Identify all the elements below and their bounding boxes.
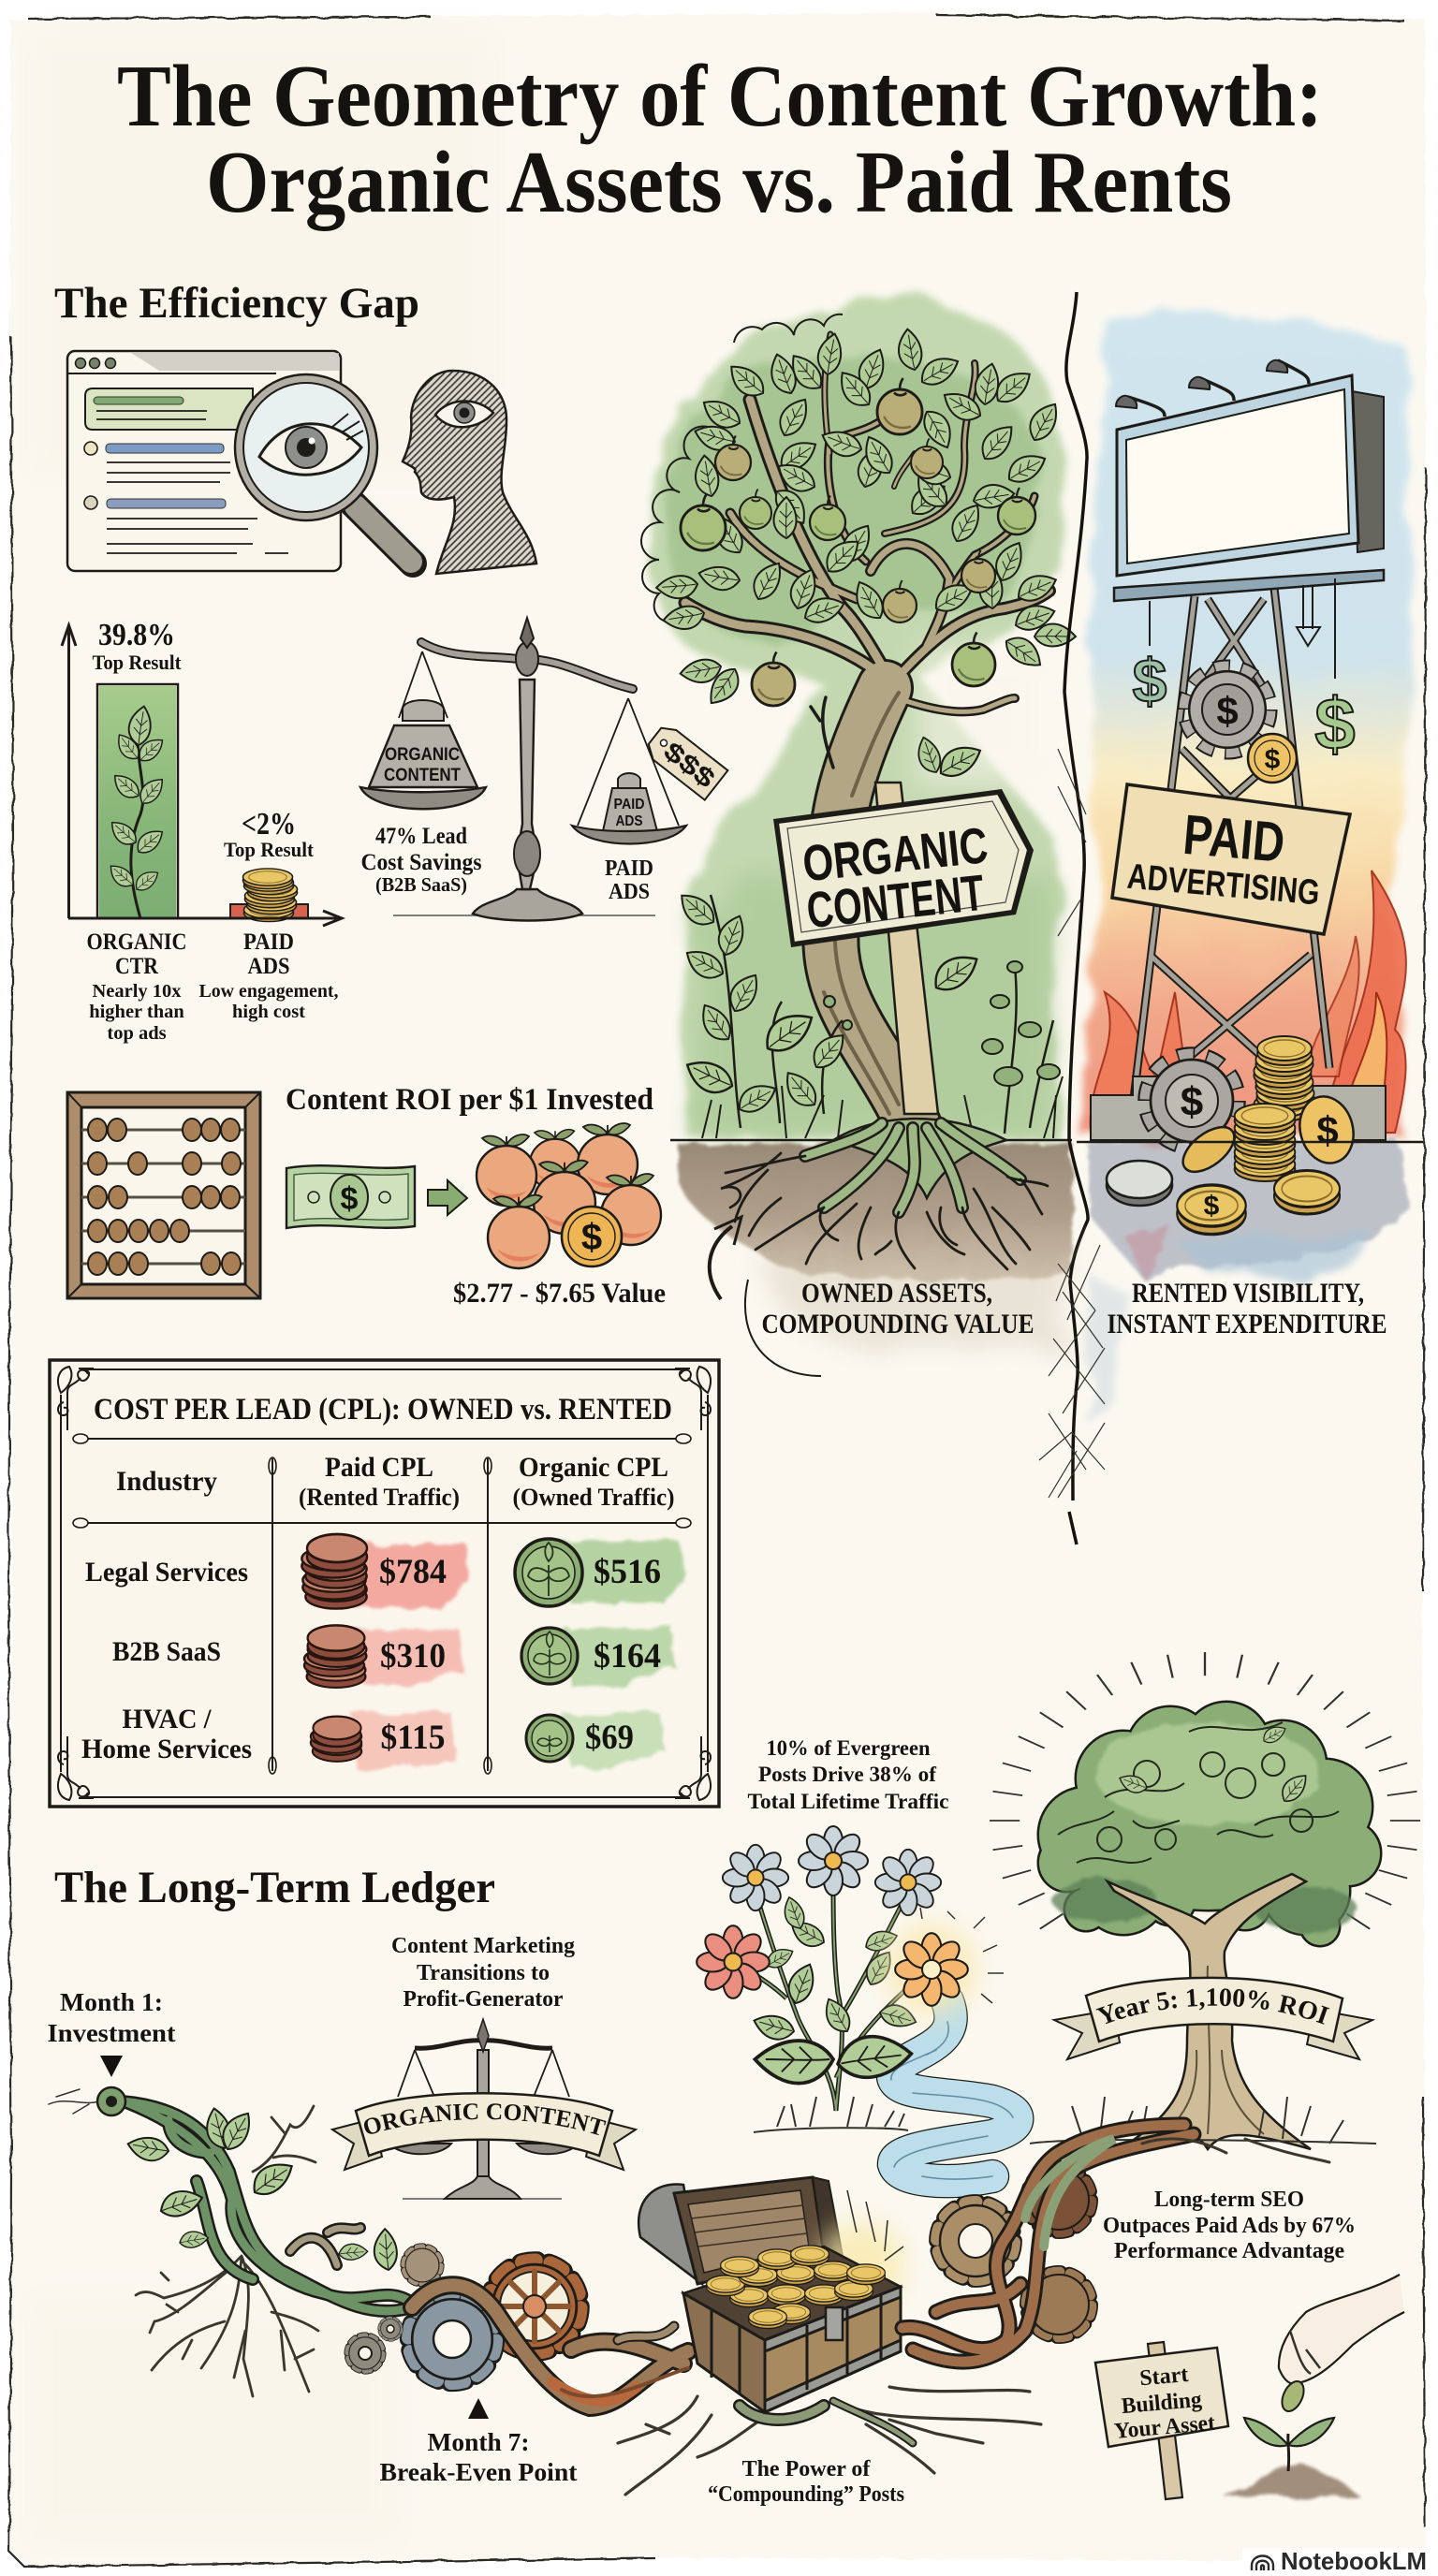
label: compounding posts: The Power of bbox=[742, 2457, 871, 2481]
icon: balance scale bbox=[360, 618, 727, 921]
label: evergreen posts: 10% of Evergreen bbox=[766, 1736, 931, 1760]
bar chart: organic vs paid CTR: 39.8% bbox=[98, 618, 175, 652]
icon: treasure chest bbox=[638, 2177, 904, 2412]
icon: dollar bill bbox=[286, 1165, 415, 1228]
start node bbox=[97, 2087, 125, 2115]
label: month 1: Month 1: bbox=[60, 1988, 163, 2016]
table header: (Owned Traffic) bbox=[513, 1484, 674, 1511]
row: legal services: $516 bbox=[594, 1553, 661, 1591]
row: HVAC / home services: Home Services bbox=[81, 1734, 252, 1764]
row: HVAC / home services: HVAC / bbox=[122, 1704, 212, 1734]
value label: $2.77 - $7.65 Value bbox=[453, 1278, 666, 1309]
ribbon: year 5 bbox=[1050, 1977, 1376, 2061]
label: compounding posts bbox=[708, 2457, 904, 2507]
organic content sign post bbox=[875, 783, 938, 1114]
table washes bbox=[351, 1541, 684, 1769]
roots under chest bbox=[618, 2387, 1041, 2495]
rubble, gear and coins: $ bbox=[1316, 1108, 1339, 1152]
hanging dollars: $ bbox=[1314, 682, 1356, 765]
bar chart: organic vs paid CTR: higher than bbox=[89, 1002, 184, 1022]
tree branches bbox=[685, 334, 1049, 1147]
bar chart: organic vs paid CTR bbox=[62, 618, 342, 1044]
icon: balance scale: PAID bbox=[605, 856, 653, 881]
bar chart: organic vs paid CTR: <2% bbox=[242, 807, 296, 842]
label: rented visibility bbox=[1107, 1278, 1387, 1339]
icon: balance scale: ORGANIC bbox=[385, 745, 460, 765]
arrow: bill to peaches bbox=[428, 1180, 467, 1215]
icon: peaches and coin: $ bbox=[581, 1217, 602, 1258]
table header: Organic CPL bbox=[519, 1452, 668, 1483]
rays bbox=[990, 1652, 1420, 1929]
bar chart: organic vs paid CTR: PAID bbox=[243, 929, 294, 955]
billboard bbox=[1114, 360, 1384, 601]
bar chart: organic vs paid CTR: CTR bbox=[115, 954, 159, 979]
icon: peaches and coin bbox=[477, 1123, 661, 1268]
label: profit generator: Transitions to bbox=[417, 1961, 550, 1985]
flames bbox=[1091, 871, 1406, 1133]
green strands bbox=[122, 2101, 412, 2311]
gold coins bbox=[707, 2246, 885, 2329]
sign: start building your asset: Start bbox=[1138, 2363, 1189, 2391]
label: month 1: Investment bbox=[47, 2019, 176, 2047]
sign: organic content: ORGANIC bbox=[800, 817, 990, 892]
sign: paid advertising: ADVERTISING bbox=[1125, 857, 1321, 913]
sign: start building your asset: Building bbox=[1121, 2388, 1203, 2419]
label: owned assets: COMPOUNDING VALUE bbox=[762, 1309, 1034, 1339]
bar: paid with coins bbox=[230, 869, 308, 922]
bar chart: organic vs paid CTR: Low engagement, bbox=[198, 981, 339, 1002]
sign: organic content bbox=[773, 789, 1034, 947]
hanging dollars bbox=[1133, 578, 1356, 765]
soil bbox=[670, 1140, 1073, 1353]
bar chart: organic vs paid CTR: Nearly 10x bbox=[92, 981, 182, 1002]
divider crack bbox=[1064, 292, 1088, 1544]
brown strands bbox=[412, 2285, 688, 2408]
rubble, gear and coins bbox=[1077, 1036, 1423, 1235]
gold glow bbox=[818, 2222, 904, 2308]
axes bbox=[62, 625, 342, 926]
bar chart: organic vs paid CTR: ADS bbox=[247, 954, 290, 979]
brown root tangle and gears bbox=[902, 2125, 1329, 2362]
icon: price tag bbox=[643, 722, 727, 800]
label: month 7 break even bbox=[380, 2398, 577, 2486]
icon: price tag: $$$ bbox=[658, 736, 721, 794]
heading: Content ROI: Content ROI per $1 Invested bbox=[286, 1083, 653, 1117]
roots bbox=[721, 1119, 1048, 1269]
label: evergreen posts: Total Lifetime Traffic bbox=[747, 1790, 949, 1813]
icon: hatched profile head bbox=[403, 371, 536, 574]
sign: start building your asset: Your Asset bbox=[1113, 2411, 1216, 2444]
green wash bbox=[651, 297, 1066, 1138]
label: month 7 break even: Break-Even Point bbox=[380, 2458, 577, 2486]
hanging dollars: $ bbox=[1133, 646, 1167, 715]
label: rented visibility: RENTED VISIBILITY, bbox=[1132, 1278, 1364, 1309]
label: month 1 bbox=[47, 1988, 176, 2077]
rubble, gear and coins: $ bbox=[1181, 1079, 1203, 1125]
bar chart: organic vs paid CTR: ORGANIC bbox=[86, 929, 187, 955]
table header: Industry bbox=[116, 1466, 217, 1497]
flower plant bbox=[740, 1877, 922, 2111]
table title: COST PER LEAD (CPL): OWNED vs. RENTED bbox=[94, 1393, 672, 1427]
title: The Geometry of Content Growth: bbox=[117, 48, 1323, 145]
vine leaves bbox=[202, 2106, 234, 2151]
curved arrow to roots bbox=[710, 1217, 821, 1376]
icon: balance scale: PAID bbox=[614, 797, 644, 812]
icon: balance scale: ADS bbox=[609, 880, 650, 904]
dead roots bbox=[136, 2106, 318, 2396]
panel: paid billboard bbox=[1077, 313, 1423, 1423]
sign: start building your asset bbox=[1095, 2342, 1228, 2499]
icon: magnifying glass with eye bbox=[235, 374, 413, 564]
icon: balance scale: CONTENT bbox=[384, 766, 461, 785]
row: HVAC / home services: $115 bbox=[380, 1719, 446, 1757]
panel: organic tree bbox=[641, 297, 1076, 1353]
label: month 7 break even: Month 7: bbox=[427, 2428, 530, 2456]
row: B2B SaaS bbox=[112, 1625, 661, 1688]
label: profit generator: Profit-Generator bbox=[403, 1987, 564, 2012]
ribbon: organic content bbox=[330, 2074, 663, 2196]
row: legal services bbox=[85, 1534, 661, 1609]
logo: NotebookLM: NotebookLM bbox=[1281, 2547, 1427, 2575]
label: long-term SEO bbox=[1103, 2188, 1356, 2263]
ground bbox=[1030, 2097, 1376, 2144]
growth vine: green to brown bbox=[49, 2089, 688, 2408]
row: HVAC / home services bbox=[81, 1704, 634, 1764]
canopy scalloped outline bbox=[641, 315, 843, 622]
bar chart: organic vs paid CTR: top ads bbox=[107, 1023, 167, 1044]
label: evergreen posts bbox=[747, 1736, 949, 1813]
tower bbox=[1129, 588, 1329, 1137]
row: B2B SaaS: $310 bbox=[380, 1637, 446, 1676]
table header: (Rented Traffic) bbox=[299, 1484, 460, 1511]
icon: grown tree year 5 bbox=[990, 1652, 1420, 2151]
icon: balance scale: ADS bbox=[616, 813, 643, 829]
label: profit generator: Content Marketing bbox=[391, 1934, 575, 1958]
rubble, gear and coins: $ bbox=[1204, 1191, 1220, 1222]
icon: browser window search results bbox=[67, 351, 341, 571]
table header bbox=[116, 1452, 674, 1511]
bar chart: organic vs paid CTR: high cost bbox=[232, 1002, 305, 1022]
icon: seedling bbox=[1224, 2418, 1361, 2497]
title: Organic Assets vs. Paid Rents bbox=[206, 134, 1232, 231]
row: legal services: Legal Services bbox=[85, 1557, 248, 1588]
gear with coin: $ bbox=[1265, 744, 1281, 775]
row: legal services: $784 bbox=[379, 1553, 447, 1591]
bar: organic bbox=[97, 684, 178, 918]
panel: cost per lead table bbox=[50, 1360, 719, 1807]
trunk bbox=[1108, 1874, 1311, 2149]
sign: paid advertising bbox=[1112, 784, 1350, 934]
heading: The Long-Term Ledger: The Long-Term Ledger bbox=[54, 1863, 495, 1912]
icon: small scale with ribbon bbox=[330, 2016, 663, 2200]
row: HVAC / home services: $69 bbox=[585, 1719, 634, 1757]
right wash bbox=[1081, 313, 1414, 1138]
ribbon: organic content: ORGANIC CONTENT bbox=[364, 2103, 607, 2136]
leaves bbox=[655, 328, 1076, 710]
icon: flowers and stream bbox=[697, 1826, 1017, 2181]
ribbon: year 5: Year 5: 1,100% ROI bbox=[1095, 1988, 1329, 2025]
icon: abacus bbox=[67, 1092, 260, 1298]
ground wash bbox=[1086, 1142, 1409, 1282]
label: long-term SEO: Long-term SEO bbox=[1154, 2188, 1304, 2212]
icon: balance scale: (B2B SaaS) bbox=[375, 873, 467, 896]
table header: Paid CPL bbox=[325, 1452, 433, 1483]
gear with coin bbox=[1185, 667, 1297, 783]
canopy bbox=[1039, 1703, 1380, 1945]
icon: balance scale: Cost Savings bbox=[361, 850, 482, 875]
sign: organic content: CONTENT bbox=[804, 865, 987, 939]
label: profit generator bbox=[391, 1934, 575, 2012]
bar chart: organic vs paid CTR: Top Result bbox=[224, 838, 315, 861]
label: owned assets bbox=[762, 1278, 1034, 1339]
icon: hand planting seed bbox=[1278, 2275, 1404, 2415]
icon: dollar bill: $ bbox=[341, 1181, 359, 1217]
apples bbox=[681, 378, 1035, 706]
row: B2B SaaS: $164 bbox=[594, 1637, 661, 1676]
label: long-term SEO: Outpaces Paid Ads by 67% bbox=[1103, 2214, 1356, 2238]
stream bbox=[891, 2001, 1017, 2181]
heading: The Efficiency Gap: The Efficiency Gap bbox=[54, 279, 419, 328]
label: rented visibility: INSTANT EXPENDITURE bbox=[1107, 1309, 1387, 1339]
gear with coin: $ bbox=[1216, 689, 1239, 733]
label: long-term SEO: Performance Advantage bbox=[1114, 2239, 1344, 2263]
title bbox=[117, 48, 1323, 231]
icon: balance scale: 47% Lead bbox=[375, 824, 467, 849]
bar chart: organic vs paid CTR: Top Result bbox=[92, 651, 182, 674]
sign: paid advertising: PAID bbox=[1181, 803, 1287, 874]
label: evergreen posts: Posts Drive 38% of bbox=[758, 1763, 936, 1786]
label: owned assets: OWNED ASSETS, bbox=[801, 1278, 992, 1309]
shrubs bbox=[674, 735, 1063, 1138]
gears bbox=[347, 2247, 580, 2383]
label: compounding posts: “Compounding” Posts bbox=[708, 2482, 904, 2507]
row: B2B SaaS: B2B SaaS bbox=[112, 1636, 221, 1667]
grass bbox=[754, 2097, 908, 2132]
